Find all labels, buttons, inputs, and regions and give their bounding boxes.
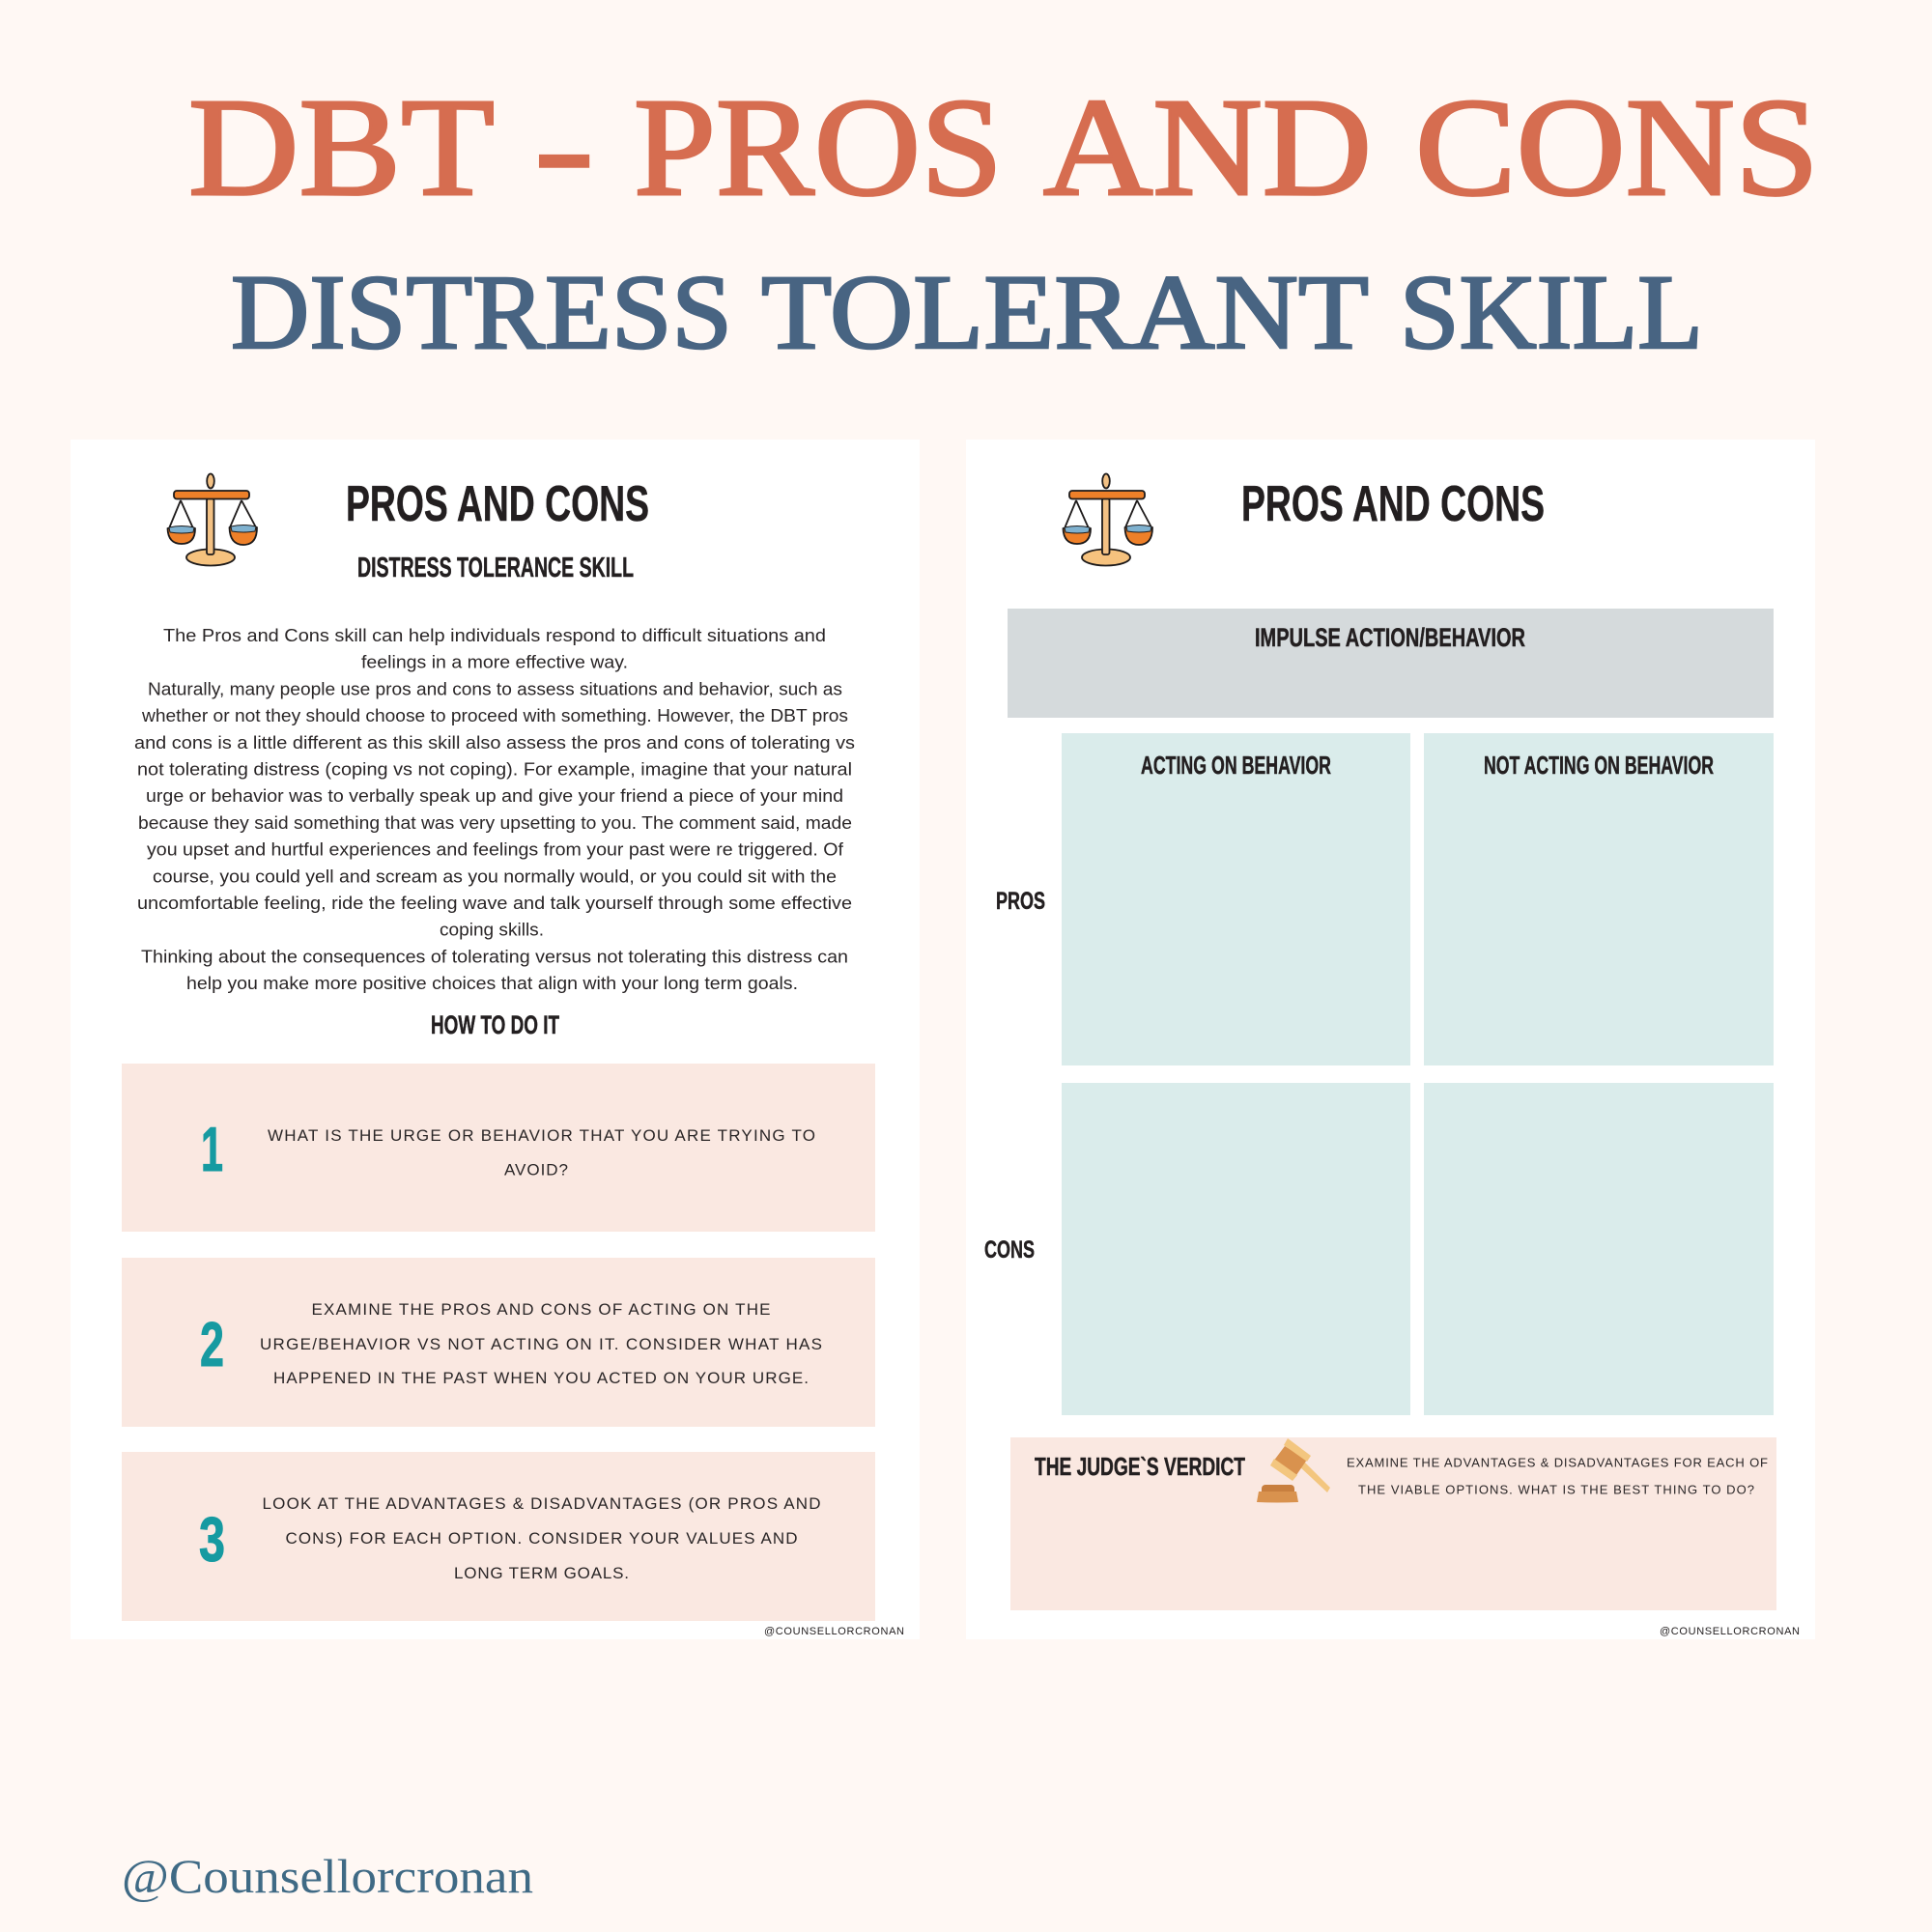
step 3: LOOK AT THE ADVANTAGES & DISADVANTAGES (OR PROS AND	[263, 1494, 821, 1513]
icon: balance scale	[1063, 473, 1152, 566]
impulse action header	[1008, 609, 1774, 718]
step 2: EXAMINE THE PROS AND CONS OF ACTING ON THE	[311, 1300, 771, 1319]
text block: explanation: because they said something that was very upsetting to you. The comment said, made	[138, 813, 852, 833]
text block: explanation: you upset and hurtful experiences and feelings from your past were re triggered. Of	[147, 840, 844, 860]
watermark: @COUNSELLORCRONAN	[764, 1626, 904, 1637]
heading: how to do it: HOW TO DO IT	[431, 1010, 559, 1039]
step 3	[122, 1452, 875, 1621]
heading: distress tolerance skill: DISTRESS TOLERANCE SKILL	[357, 553, 634, 583]
heading: the judge's verdict: THE JUDGE`S VERDICT	[1035, 1452, 1245, 1481]
step 1: 1	[201, 1114, 223, 1184]
text block: explanation: coping skills.	[440, 921, 544, 940]
step 3: CONS) FOR EACH OPTION. CONSIDER YOUR VALUES AND	[286, 1529, 798, 1548]
subtitle: SKILL	[1400, 253, 1703, 371]
text block: verdict instructions	[1347, 1456, 1768, 1497]
title: -	[534, 71, 594, 225]
cell: pros, not acting: NOT ACTING ON BEHAVIOR	[1484, 751, 1714, 780]
row label: pros: PROS	[996, 888, 1045, 915]
handle: @Counsellorcronan	[122, 1849, 533, 1903]
step 2: URGE/BEHAVIOR VS NOT ACTING ON IT. CONSIDER WHAT HAS	[260, 1335, 822, 1353]
impulse action header: IMPULSE ACTION/BEHAVIOR	[1255, 623, 1525, 652]
title: PROS	[634, 71, 1003, 225]
text block: explanation: feelings in a more effective way.	[361, 653, 628, 672]
step 1	[122, 1064, 875, 1232]
icon: gavel	[1257, 1438, 1330, 1503]
text block: explanation: and cons is a little different as this skill also assess the pros and cons of tolerating vs	[134, 733, 855, 753]
step 3: LONG TERM GOALS.	[454, 1564, 629, 1582]
text block: explanation: The Pros and Cons skill can help individuals respond to difficult situations and	[163, 626, 826, 645]
text block: explanation: help you make more positive choices that align with your long term goals.	[186, 974, 798, 993]
text block: explanation: urge or behavior was to verbally speak up and give your friend a piece of your mind	[146, 786, 843, 806]
panel: explanation sheet	[71, 440, 920, 1639]
title: DBT	[188, 71, 495, 225]
step 2: 2	[200, 1309, 224, 1379]
subtitle	[231, 253, 1703, 371]
cell: cons, acting	[1062, 1083, 1410, 1415]
subtitle: TOLERANT	[761, 253, 1369, 371]
cell: cons, not acting	[1424, 1083, 1774, 1415]
panel: judge's verdict	[1010, 1437, 1776, 1610]
step 2: HAPPENED IN THE PAST WHEN YOU ACTED ON YOUR URGE.	[273, 1369, 809, 1387]
panel: worksheet	[966, 440, 1815, 1639]
text block: explanation: course, you could yell and scream as you normally would, or you could sit with the	[153, 867, 837, 886]
text block: explanation: whether or not they should choose to proceed with something. However, the DBT pros	[141, 706, 848, 725]
step 1: WHAT IS THE URGE OR BEHAVIOR THAT YOU ARE TRYING TO	[268, 1126, 815, 1145]
title	[188, 71, 1819, 225]
cell: pros, acting: ACTING ON BEHAVIOR	[1141, 751, 1331, 780]
text block: explanation: Naturally, many people use pros and cons to assess situations and behavior, such as	[148, 679, 842, 698]
cell: pros, acting	[1062, 733, 1410, 1065]
subtitle: DISTRESS	[231, 253, 732, 371]
text block: explanation: Thinking about the consequences of tolerating versus not tolerating this distress can	[141, 947, 848, 966]
text block: explanation: not tolerating distress (coping vs not coping). For example, imagine that your natural	[137, 759, 852, 779]
text block: explanation: uncomfortable feeling, ride the feeling wave and talk yourself through some effective	[137, 894, 852, 913]
heading: pros and cons: PROS AND CONS	[1241, 476, 1545, 532]
text block: explanation	[134, 626, 855, 993]
watermark: @COUNSELLORCRONAN	[1660, 1626, 1800, 1637]
row label: cons: CONS	[984, 1236, 1035, 1264]
cell: pros, not acting	[1424, 733, 1774, 1065]
step 1: AVOID?	[504, 1161, 568, 1179]
text block: verdict instructions: EXAMINE THE ADVANTAGES & DISADVANTAGES FOR EACH OF	[1347, 1456, 1768, 1470]
text block: verdict instructions: THE VIABLE OPTIONS. WHAT IS THE BEST THING TO DO?	[1358, 1483, 1754, 1497]
step 2	[122, 1258, 875, 1427]
title: CONS	[1415, 71, 1819, 225]
icon: balance scale	[168, 473, 257, 566]
heading: pros and cons: PROS AND CONS	[346, 476, 649, 532]
title: AND	[1043, 71, 1372, 225]
step 3: 3	[199, 1504, 225, 1575]
